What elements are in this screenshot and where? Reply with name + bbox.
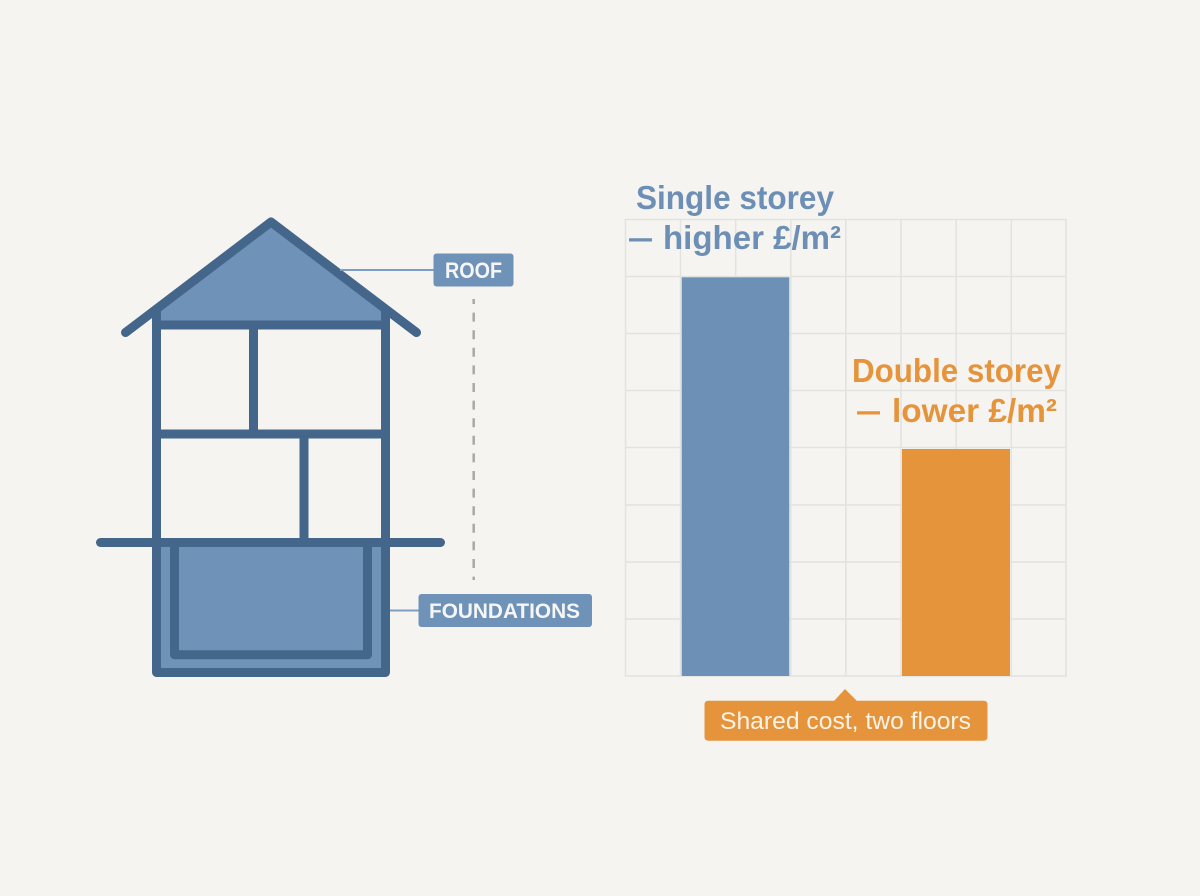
heading: single storey: Single storey bbox=[636, 179, 835, 216]
label: roof bbox=[340, 254, 514, 286]
bar chart bbox=[626, 179, 1066, 676]
chart grid bbox=[626, 220, 1066, 676]
heading: single storey: higher £/m² bbox=[663, 219, 841, 256]
label: foundations bbox=[390, 594, 592, 627]
roof outline bbox=[126, 222, 416, 332]
bar: single storey bbox=[682, 277, 789, 676]
ground line bbox=[100, 538, 440, 547]
inner foundation slab bbox=[174, 542, 368, 655]
foundation fill bbox=[157, 542, 386, 673]
heading: double storey bbox=[852, 352, 1062, 429]
roof fill bbox=[157, 222, 385, 325]
heading: double storey: — bbox=[857, 392, 880, 429]
callout: shared cost: Shared cost, two floors bbox=[720, 708, 971, 735]
house cross-section diagram bbox=[100, 222, 440, 673]
label: roof: ROOF bbox=[445, 258, 502, 283]
house walls, floors and foundation outline bbox=[156, 310, 386, 672]
label: foundations: FOUNDATIONS bbox=[429, 599, 580, 623]
heading: single storey: — bbox=[629, 219, 652, 256]
heading: double storey: Double storey bbox=[852, 352, 1062, 389]
heading: double storey: lower £/m² bbox=[892, 392, 1057, 429]
callout: shared cost bbox=[704, 689, 988, 741]
bar: double storey bbox=[902, 449, 1010, 676]
dashed connector between labels bbox=[472, 299, 475, 580]
heading: single storey bbox=[629, 179, 841, 256]
